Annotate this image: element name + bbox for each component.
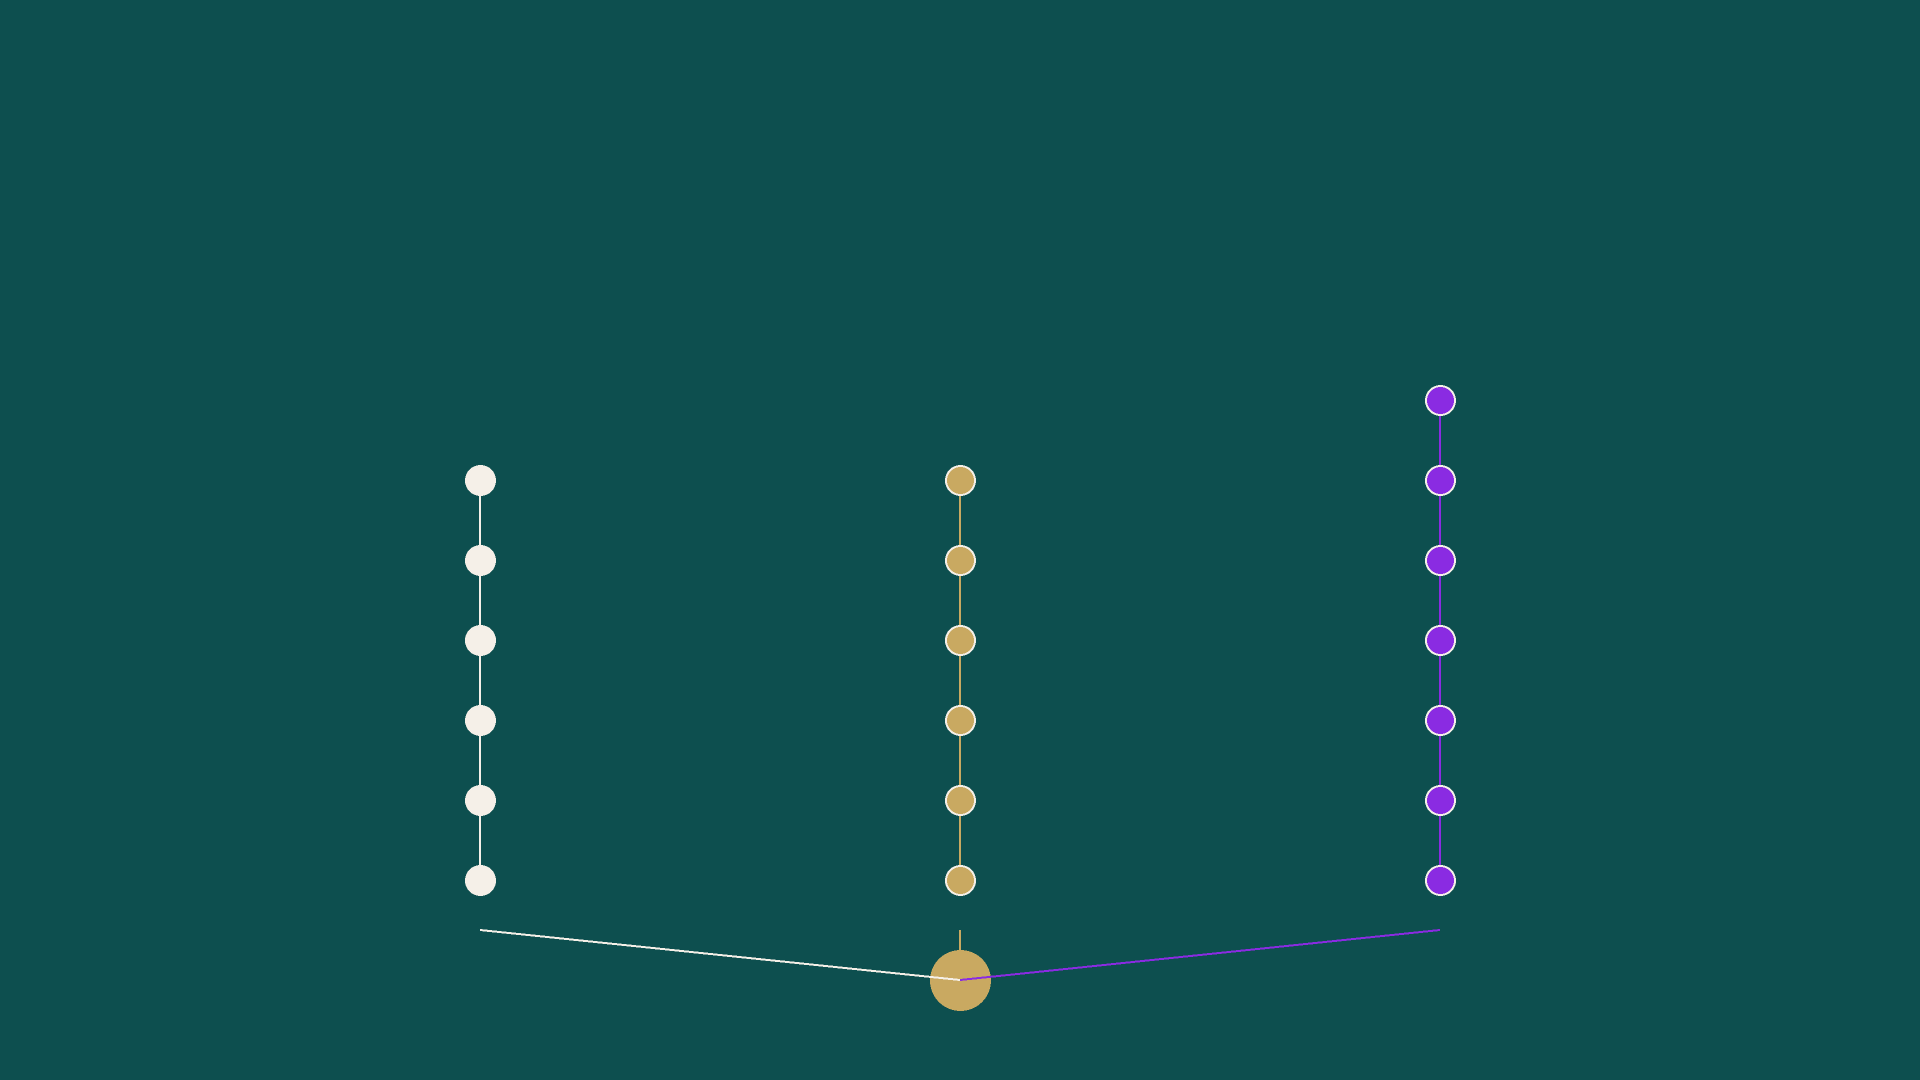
hub: central gold circle (930, 950, 991, 1011)
column: gold nodes (946, 466, 975, 895)
connector: cream branch to hub (480, 930, 960, 980)
connector: gold stem to hub (959, 930, 961, 980)
column: purple nodes (1426, 386, 1455, 895)
column: cream nodes (466, 466, 495, 895)
connector: purple branch to hub (960, 930, 1440, 980)
